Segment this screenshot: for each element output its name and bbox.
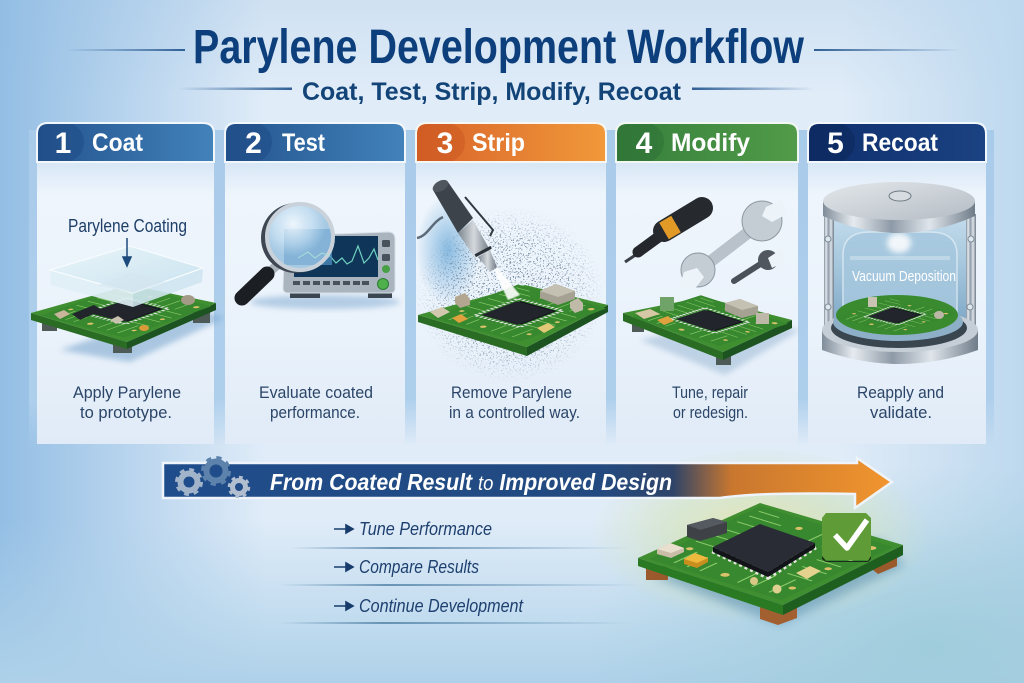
icon: check badge xyxy=(822,513,871,562)
caption: Remove Parylene xyxy=(451,383,572,402)
icon: gears xyxy=(177,458,248,496)
caption: Tune, repair xyxy=(672,383,748,402)
arrow banner xyxy=(163,458,892,508)
title rule right xyxy=(814,49,960,51)
icon: wrench xyxy=(680,200,787,290)
caption xyxy=(73,383,181,422)
title: Parylene Development Workflow xyxy=(193,21,805,74)
header: 4 Modify: Modify xyxy=(671,129,750,157)
icon: monitor xyxy=(250,232,400,309)
bullet: tune performance: Tune Performance xyxy=(359,519,492,539)
caption xyxy=(259,383,373,422)
icon: small spanner xyxy=(734,250,784,281)
subtitle rule right xyxy=(692,88,814,90)
improved circuit board xyxy=(638,503,905,625)
icon: circuit board with coating xyxy=(31,285,225,362)
caption xyxy=(857,383,944,422)
panel: test xyxy=(225,123,405,444)
panel gaps xyxy=(29,130,994,446)
caption xyxy=(449,383,580,422)
coating label: Parylene Coating xyxy=(68,216,187,236)
bullet list xyxy=(280,519,640,624)
caption: performance. xyxy=(270,403,360,422)
icon: coating slab xyxy=(50,246,203,307)
header: 1 Coat xyxy=(37,123,214,162)
arrow: coating down xyxy=(123,238,131,266)
icon: screwdriver xyxy=(625,208,702,262)
caption: Evaluate coated xyxy=(259,383,373,402)
header: 5 Recoat: Recoat xyxy=(862,129,939,157)
subtitle: Coat, Test, Strip, Modify, Recoat xyxy=(302,78,682,106)
panel: strip xyxy=(416,123,608,444)
icon: spray nozzle xyxy=(417,177,497,272)
header: 3 Strip: 3 xyxy=(437,127,453,160)
header: 1 Coat: Coat xyxy=(92,129,144,157)
panel: coat xyxy=(31,123,225,444)
subtitle rule left xyxy=(178,88,292,90)
caption: validate. xyxy=(870,403,932,422)
caption: Reapply and xyxy=(857,383,944,402)
caption: in a controlled way. xyxy=(449,403,580,422)
icon: large chip xyxy=(713,524,815,577)
icon: vacuum chamber xyxy=(822,182,978,364)
caption: or redesign. xyxy=(673,403,748,422)
caption: Apply Parylene xyxy=(73,383,181,402)
header: 5 Recoat xyxy=(808,123,986,162)
caption xyxy=(672,383,748,422)
panel: modify xyxy=(616,123,800,444)
header: 1 Coat: 1 xyxy=(55,127,71,160)
chamber label: Vacuum Deposition xyxy=(852,268,956,285)
icon: particles xyxy=(418,210,602,380)
blue spray glow xyxy=(416,195,480,305)
header: 2 Test xyxy=(225,123,405,162)
panel: recoat xyxy=(808,123,986,444)
icon: circuit board being stripped xyxy=(418,284,608,356)
header: 4 Modify: 4 xyxy=(636,127,653,160)
icon: magnifying glass xyxy=(242,203,333,298)
banner text: From Coated Result to Improved Design xyxy=(270,469,672,495)
header: 5 Recoat: 5 xyxy=(827,127,844,160)
bullet: compare results: Compare Results xyxy=(359,557,479,577)
icon: spray cone xyxy=(494,268,520,300)
title rule left xyxy=(65,49,185,51)
header: 2 Test: 2 xyxy=(245,127,262,160)
header: 4 Modify xyxy=(616,123,798,162)
bullet: continue development: Continue Development xyxy=(359,596,524,616)
caption: to prototype. xyxy=(80,403,172,422)
header: 2 Test: Test xyxy=(282,129,326,157)
header: 3 Strip: Strip xyxy=(472,129,525,157)
header: 3 Strip xyxy=(416,123,606,162)
icon: circuit board xyxy=(623,295,800,375)
